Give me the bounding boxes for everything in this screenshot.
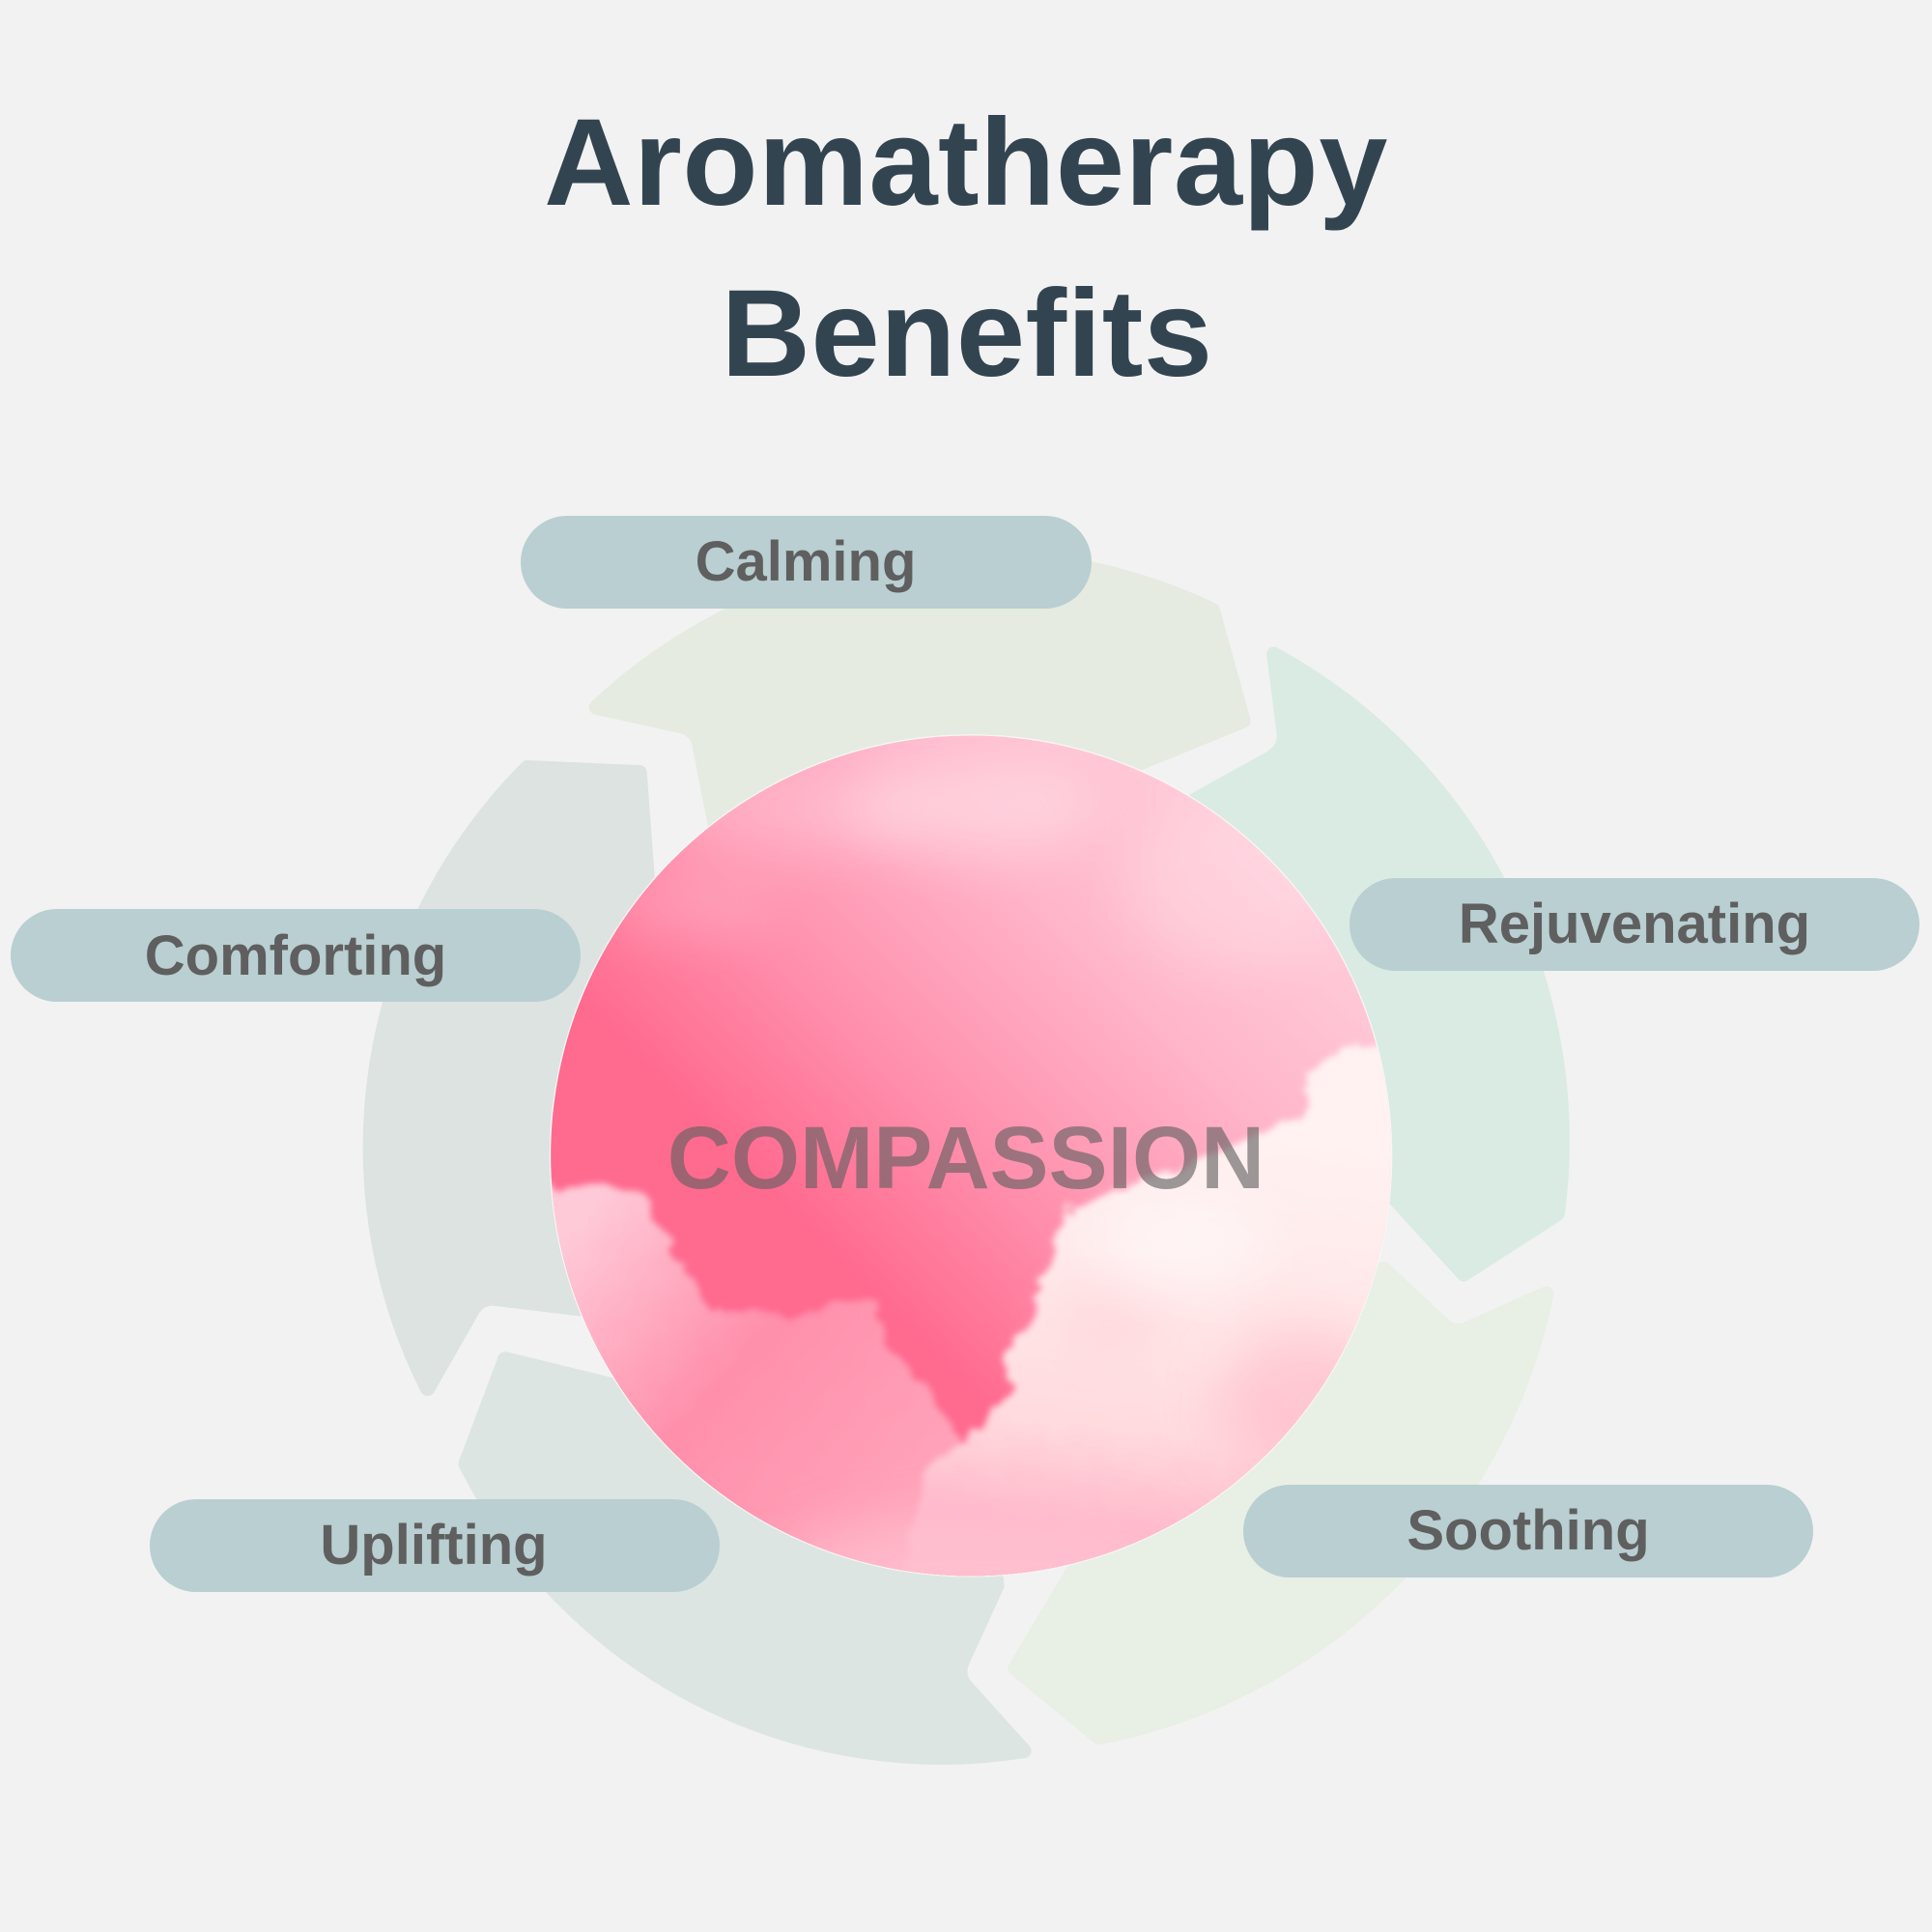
cycle of five arrows — [370, 557, 1562, 1757]
pill: Comforting: Comforting — [145, 924, 446, 987]
pill: Soothing: Soothing — [1406, 1499, 1650, 1562]
arrow: uplifting segment — [466, 1359, 1024, 1757]
pill: Uplifting — [150, 1499, 720, 1592]
pill: Rejuvenating — [1350, 878, 1919, 971]
top wispy clouds — [625, 752, 1309, 956]
pill: Comforting — [11, 909, 581, 1002]
arrow: comforting segment — [370, 768, 863, 1388]
title — [544, 94, 1388, 403]
pill: Uplifting: Uplifting — [320, 1514, 548, 1577]
central circle image: pink clouds — [550, 734, 1393, 1577]
arrow: calming segment — [596, 557, 1243, 985]
bottom haze — [800, 1509, 1111, 1577]
pill: Rejuvenating: Rejuvenating — [1459, 893, 1810, 955]
title: Aromatherapy — [544, 94, 1388, 232]
pill: Calming: Calming — [696, 530, 916, 593]
pill: Calming — [521, 516, 1092, 609]
arrow: rejuvenating segment — [1109, 654, 1562, 1274]
arrow: soothing segment — [1015, 1269, 1547, 1737]
pill: Soothing — [1243, 1485, 1813, 1577]
cloud shading — [1094, 1312, 1122, 1335]
center label: COMPASSION — [668, 1109, 1264, 1208]
lower-left cloud — [552, 1179, 964, 1571]
lower-right cloud — [911, 1041, 1391, 1577]
title: Benefits — [721, 265, 1213, 403]
